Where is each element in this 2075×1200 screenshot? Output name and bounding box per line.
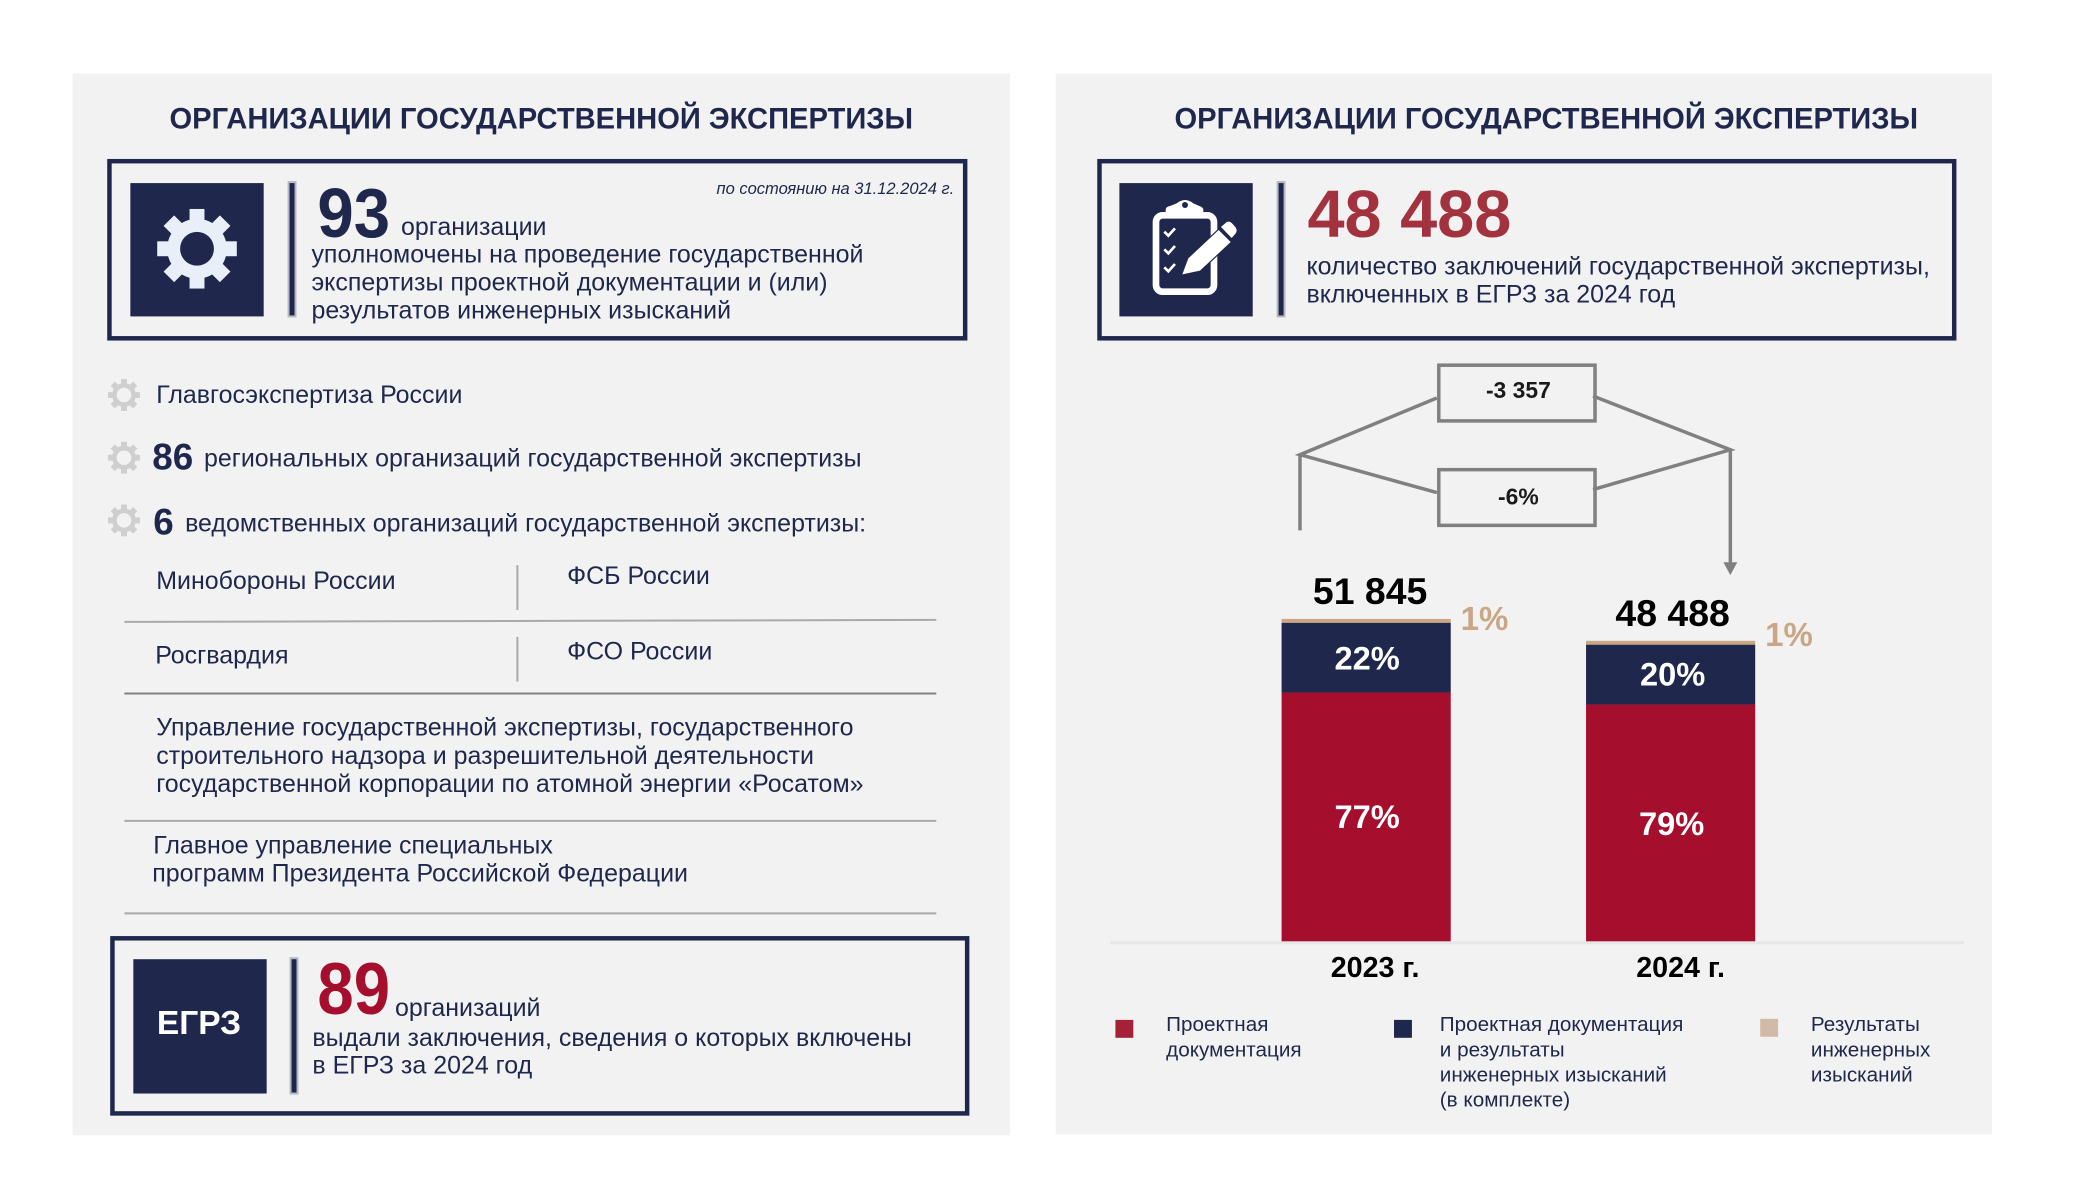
panel: right, conclusions (1056, 74, 1992, 1134)
bar: 2023: 1% (1461, 600, 1508, 637)
big number 48 488: 48 488 (1307, 178, 1511, 252)
callout: 93 organizations (109, 161, 965, 338)
heading: right panel: ОРГАНИЗАЦИИ ГОСУДАРСТВЕННОЙ ЭКСПЕРТИЗЫ (1174, 101, 1918, 135)
text: callout description: уполномочены на проведение государственной (311, 241, 863, 269)
table: departmental organizations (124, 562, 936, 913)
legend item: survey results (1760, 1013, 1931, 1087)
legend item: documentation and survey results: и результаты (1440, 1039, 1565, 1062)
text: callout description: экспертизы проектной документации и (или) (311, 269, 828, 297)
big number 93: 93 (317, 174, 390, 252)
text: callout description: включенных в ЕГРЗ за 2024 год (1306, 280, 1676, 308)
legend item: design documentation: Проектная (1166, 1013, 1268, 1036)
callout: absolute change (1439, 365, 1595, 421)
text: organizations: организации (401, 213, 546, 241)
legend item: survey results: Результаты (1811, 1013, 1920, 1036)
list item: 86 regional organizations: региональных организаций государственной экспертизы (204, 445, 862, 473)
bar: 2023: 77% (1334, 798, 1400, 835)
legend item: documentation and survey results (1394, 1013, 1683, 1111)
table: departmental organizations: строительного надзора и разрешительной деятельности (156, 742, 814, 770)
bar: 2023: 51 845 (1313, 570, 1427, 612)
table: departmental organizations: ФСО России (567, 638, 712, 666)
list item: 6 departmental organizations (108, 501, 866, 542)
list item: 6 departmental organizations: 6 (153, 501, 174, 542)
text: callout description (312, 1024, 912, 1080)
text: callout description: количество заключений государственной экспертизы, (1306, 253, 1930, 281)
legend item: survey results: инженерных (1811, 1039, 1931, 1062)
legend item: documentation and survey results: инженерных изысканий (1440, 1064, 1667, 1087)
text: callout description (1306, 253, 1930, 308)
icon: EGRZ badge (133, 959, 267, 1094)
legend item: documentation and survey results: (в комплекте) (1440, 1088, 1570, 1111)
icon: clipboard with pencil (1119, 183, 1253, 316)
bar: 2023: 22% (1334, 640, 1400, 677)
bar: 2024: 20% (1640, 656, 1705, 693)
text: callout description: результатов инженерных изысканий (311, 296, 731, 324)
big number 89: 89 (317, 947, 390, 1030)
table: departmental organizations: Главное управление специальных (153, 832, 553, 860)
list item: 86 regional organizations: 86 (152, 437, 193, 478)
bar chart: 2023 and 2024 (1110, 570, 1964, 984)
icon: EGRZ badge: ЕГРЗ (157, 1005, 241, 1042)
bar: 2024: 48 488 (1615, 592, 1730, 634)
bar: 2024: 1% (1765, 616, 1813, 653)
legend item: design documentation (1115, 1013, 1302, 1062)
table: departmental organizations: ФСБ России (567, 562, 710, 590)
callout: percent change (1439, 470, 1595, 525)
callout: 48 488 conclusions (1099, 161, 1954, 338)
text: organizations: организаций (395, 994, 541, 1022)
bar: 2024: 2024 г. (1636, 952, 1725, 984)
table: departmental organizations: государственной корпорации по атомной энергии «Росатом» (156, 770, 864, 798)
table: departmental organizations: Управление государственной экспертизы, государственного (156, 713, 853, 741)
bar: 2023 (1282, 570, 1508, 984)
legend item: design documentation: документация (1166, 1039, 1302, 1062)
text: callout description (311, 241, 863, 324)
icon: gear (130, 183, 264, 316)
arrows: change between years (1300, 396, 1737, 575)
callout: percent change: -6% (1498, 483, 1539, 509)
legend item: documentation and survey results: Проектная документация (1440, 1013, 1683, 1036)
heading: left panel: ОРГАНИЗАЦИИ ГОСУДАРСТВЕННОЙ ЭКСПЕРТИЗЫ (170, 101, 913, 135)
text: callout description: в ЕГРЗ за 2024 год (312, 1052, 533, 1080)
callout: absolute change: -3 357 (1486, 377, 1551, 403)
list item: Glavgosexpertiza: Главгосэкспертиза России (156, 381, 462, 409)
bar: 2023: 2023 г. (1331, 952, 1419, 984)
callout: 89 organizations in EGRZ (112, 938, 967, 1113)
table: departmental organizations: программ Президента Российской Федерации (152, 860, 688, 888)
table: departmental organizations: Минобороны России (156, 567, 396, 595)
bar: 2024: 79% (1639, 805, 1704, 842)
panel: left, expertise organizations (73, 74, 1010, 1135)
list item: 86 regional organizations (108, 437, 862, 478)
legend item: survey results: изысканий (1811, 1064, 1913, 1087)
list item: 6 departmental organizations: ведомственных организаций государственной экспертизы: (185, 509, 866, 537)
text: callout description: выдали заключения, сведения о которых включены (312, 1024, 912, 1052)
bar: 2024 (1586, 592, 1813, 984)
table: departmental organizations: Росгвардия (155, 642, 288, 670)
legend (1115, 1013, 1931, 1111)
text: date note: по состоянию на 31.12.2024 г. (717, 180, 954, 198)
